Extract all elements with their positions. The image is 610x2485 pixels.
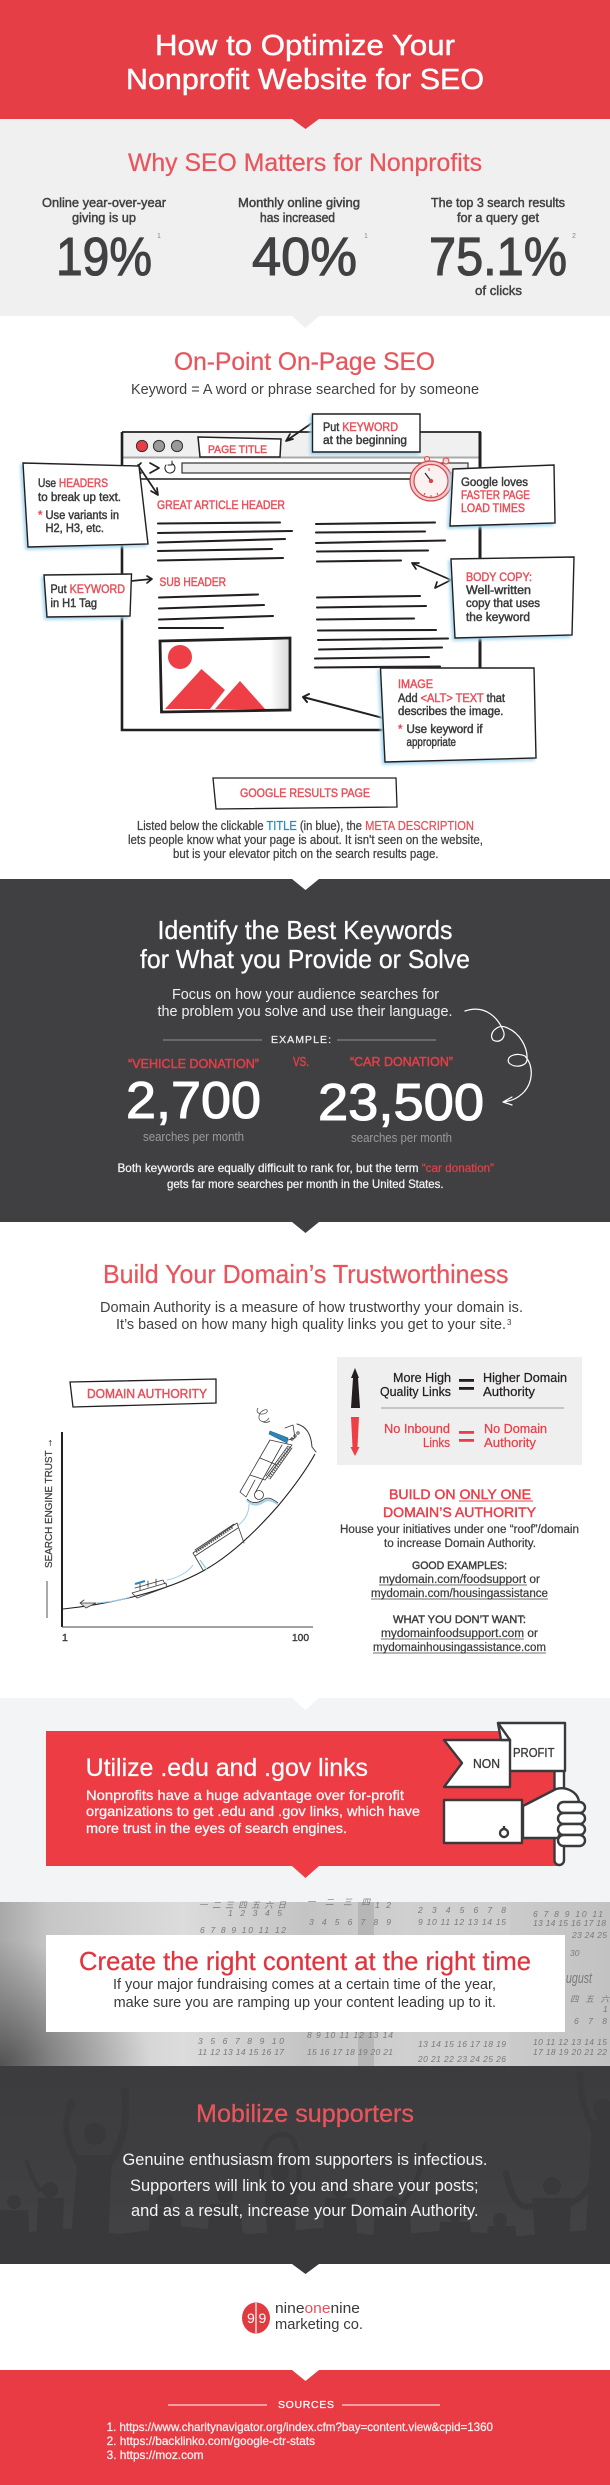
bad examples: mydomainfoodsupport.com or — [381, 1628, 538, 1640]
text: build on one domain — [340, 1487, 579, 1654]
water wake — [97, 1504, 249, 1603]
text: domain authority definition: 3 — [507, 1318, 512, 1327]
label: example: EXAMPLE: — [271, 1034, 331, 1046]
calendar numbers: 一 二 三 四 五 六 日 — [199, 1900, 286, 1910]
callout: image alt text: Add <ALT> TEXT that — [398, 693, 506, 705]
calendar numbers: 20 21 22 23 24 25 26 — [417, 2054, 506, 2064]
y axis label: SEARCH ENGINE TRUST → — [43, 1438, 55, 1568]
text: google results explanation — [128, 819, 483, 861]
text: fundraising timing: make sure you are ramping up your content leading up to it. — [114, 1994, 496, 2011]
callout: keyword in H1: in H1 Tag — [50, 598, 97, 610]
title — [126, 30, 484, 96]
text: more links: Higher Domain — [483, 1370, 567, 1385]
text: no links: No Inbound — [384, 1421, 450, 1436]
source list: 2. https://backlinko.com/google-ctr-stats — [107, 2434, 315, 2448]
stat: 40 percent: Monthly online giving — [238, 196, 360, 210]
good examples — [371, 1560, 548, 1600]
icon: aircraft carrier — [240, 1408, 316, 1504]
icon: stopwatch — [410, 456, 452, 501]
heading: identify keywords: for What you Provide or Solve — [140, 944, 470, 974]
keyword: vehicle donation — [126, 1056, 261, 1144]
logo: nine one nine marketing: 9 — [258, 2310, 266, 2326]
stat: 75.1 percent: for a query get — [457, 211, 540, 225]
calendar numbers — [198, 1897, 610, 2064]
good examples: mydomain.com/housingassistance — [371, 1588, 548, 1600]
text: build on one domain: BUILD ON ONLY ONE — [389, 1487, 531, 1502]
axes — [61, 1432, 63, 1627]
callout: image alt text: Use keyword if — [406, 724, 483, 736]
text: genuine enthusiasm: Supporters will link to you and share your posts; — [130, 2176, 479, 2195]
section: identify keywords — [0, 879, 610, 1233]
calendar numbers: 10 11 12 13 14 15 — [533, 2037, 607, 2047]
heading: identify keywords — [140, 915, 470, 974]
article header label: GREAT ARTICLE HEADER — [157, 498, 285, 512]
lower right text lines — [315, 596, 448, 668]
stat: 40 percent: 40% — [252, 227, 357, 287]
calendar numbers: 23 24 25 — [571, 1930, 607, 1940]
calendar numbers: 9 10 11 12 13 14 15 — [418, 1917, 506, 1927]
text: keyword comparison — [118, 1161, 494, 1191]
image placeholder — [160, 638, 290, 712]
text: no links: No Domain — [484, 1421, 547, 1436]
keyword definition: Keyword = A word or phrase searched for by someone — [131, 382, 479, 398]
calendar numbers: 四 五 六 — [570, 1994, 610, 2004]
label: versus: VS. — [293, 1054, 309, 1069]
callout: headers: to break up text. — [38, 492, 121, 504]
icon: hand holding nonprofit flag: PROFIT — [513, 1746, 555, 1760]
text: more links: More High — [393, 1370, 451, 1385]
text: build on one domain: House your initiatives under one “roof”/domain — [340, 1524, 579, 1536]
callout: image alt text: * — [398, 724, 403, 736]
stat: 75.1 percent: of clicks — [475, 284, 522, 298]
text: no links: Links — [423, 1435, 450, 1450]
calendar numbers: 15 16 17 18 19 20 21 — [307, 2047, 393, 2057]
stat: 40 percent — [238, 196, 368, 287]
x axis labels: 1 — [62, 1632, 68, 1644]
page title tab — [198, 437, 281, 457]
growth curve — [63, 1454, 315, 1609]
section: right content right time — [0, 1897, 610, 2066]
text: fundraising timing: If your major fundraising comes at a certain time of the year, — [113, 1976, 496, 1993]
window buttons — [136, 440, 183, 452]
panel: link quality comparison — [337, 1357, 582, 1465]
title: How to Optimize Your — [155, 30, 456, 62]
callout: headers: H2, H3, etc. — [46, 523, 104, 535]
text: focus on audience: the problem you solve and use their language. — [158, 1003, 452, 1020]
keyword: car donation — [318, 1054, 484, 1145]
text: domain authority definition — [100, 1299, 523, 1333]
callout: keyword in H1: Put KEYWORD — [50, 584, 125, 596]
logo: nine one nine marketing: marketing co. — [275, 2316, 363, 2333]
text: google results explanation: lets people know what your page is about. It isn't seen on the website, — [128, 833, 483, 847]
calendar numbers: 30 — [570, 1948, 580, 1958]
text: build on one domain: DOMAIN’S AUTHORITY — [383, 1505, 536, 1520]
stat: 75.1 percent — [429, 196, 576, 298]
callout: faster page load — [450, 465, 555, 526]
keyword: car donation: “CAR DONATION” — [350, 1054, 453, 1069]
text: no links: Authority — [484, 1435, 536, 1450]
logo: nine one nine marketing — [242, 2300, 363, 2334]
icon: cruise ship — [193, 1523, 244, 1570]
calendar numbers: 3 5 6 7 8 9 10 — [198, 2036, 284, 2046]
label: sources: SOURCES — [278, 2399, 334, 2411]
keyword: car donation: searches per month — [351, 1131, 452, 1145]
callout: faster page load: Google loves — [461, 477, 528, 489]
text: google results explanation: Listed below the clickable TITLE (in blue), the META DESCRIPTION — [137, 819, 474, 833]
text: keyword comparison: gets far more searches per month in the United States. — [167, 1177, 444, 1191]
heading: mobilize supporters: Mobilize supporters — [196, 2100, 414, 2128]
bad examples — [373, 1614, 546, 1654]
stat: 19 percent: 1 — [157, 233, 161, 240]
calendar numbers: 11 12 13 14 15 16 17 — [198, 2047, 284, 2057]
heading: on-page SEO: On-Point On-Page SEO — [174, 348, 435, 376]
panel: content timing — [46, 1935, 565, 2032]
stat: 19 percent: 19% — [56, 227, 152, 287]
calendar numbers: 6 7 8 — [574, 2016, 607, 2026]
callout: faster page load: LOAD TIMES — [461, 503, 525, 515]
text: domain authority definition: Domain Authority is a measure of how trustworthy your domain is. — [100, 1299, 523, 1316]
bad examples: WHAT YOU DON’T WANT: — [393, 1614, 526, 1626]
stat: 40 percent: has increased — [260, 211, 335, 225]
callout: body copy: BODY COPY: — [466, 572, 532, 584]
x axis labels: 100 — [292, 1632, 309, 1644]
calendar numbers: 8 9 10 11 12 13 14 — [307, 2030, 393, 2040]
stat: 40 percent: 1 — [364, 233, 368, 240]
right column text lines — [316, 522, 445, 562]
icon: yacht — [132, 1579, 167, 1598]
calendar numbers: 3 4 5 6 7 8 9 — [309, 1917, 391, 1927]
source list: 3. https://moz.com — [107, 2448, 204, 2462]
title: Nonprofit Website for SEO — [126, 64, 484, 96]
callout: page title keyword — [286, 414, 420, 452]
left column text lines — [158, 522, 292, 560]
logo: nine one nine marketing: 9 — [247, 2310, 255, 2326]
callout: headers — [23, 463, 158, 547]
label: google results page: GOOGLE RESULTS PAGE — [240, 786, 370, 800]
text: google results explanation: but is your elevator pitch on the search results page. — [173, 847, 438, 861]
callout: body copy: the keyword — [466, 612, 530, 624]
callout: headers: Use HEADERS — [38, 478, 108, 490]
text: edu links — [86, 1787, 420, 1836]
calendar numbers: 17 18 19 20 21 22 — [533, 2047, 607, 2057]
calendar numbers: 6 7 8 9 10 11 12 — [200, 1925, 286, 1935]
text: genuine enthusiasm — [122, 2150, 488, 2220]
heading: create content: Create the right content at the right time — [79, 1946, 531, 1976]
callout: page title keyword: Put KEYWORD — [323, 422, 398, 434]
text: focus on audience — [158, 986, 452, 1020]
calendar numbers: 13 14 15 16 17 18 — [533, 1918, 606, 1928]
text: fundraising timing — [113, 1976, 496, 2011]
label: domain authority — [70, 1379, 216, 1407]
bad examples: mydomainhousingassistance.com — [373, 1642, 546, 1654]
stat: 19 percent: Online year-over-year — [42, 196, 166, 210]
navigation icons and address bar — [136, 461, 468, 473]
heading: build trustworthiness: Build Your Domain’s Trustworthiness — [103, 1259, 508, 1289]
calendar numbers: 1 2 3 4 5 — [228, 1908, 282, 1918]
heading: identify keywords: Identify the Best Keywords — [158, 915, 452, 945]
x axis labels — [62, 1632, 309, 1644]
chart: domain authority curve — [43, 1408, 316, 1644]
callout: faster page load: FASTER PAGE — [461, 490, 530, 502]
section: mobilize supporters — [0, 2066, 610, 2274]
calendar numbers: 1 — [603, 2004, 608, 2014]
label: domain authority: DOMAIN AUTHORITY — [87, 1387, 208, 1401]
text: focus on audience: Focus on how your audience searches for — [172, 986, 439, 1003]
label: google results page — [213, 778, 397, 809]
text: domain authority definition: It’s based on how many high quality links you get to your site. — [116, 1316, 506, 1333]
source list — [107, 2420, 493, 2462]
arrow: curly arrow — [465, 1009, 531, 1105]
good examples: GOOD EXAMPLES: — [412, 1560, 507, 1572]
callout: page title keyword: at the beginning — [323, 435, 407, 447]
stat: 19 percent — [42, 196, 166, 287]
callout: body copy: Well-written — [466, 585, 531, 597]
good examples: mydomain.com/foodsupport or — [379, 1574, 540, 1586]
text: keyword comparison: Both keywords are equally difficult to rank for, but the term “car donation” — [118, 1161, 494, 1175]
callout: body copy — [412, 557, 574, 638]
text: genuine enthusiasm: Genuine enthusiasm from supporters is infectious. — [122, 2150, 488, 2169]
stat: 19 percent: giving is up — [72, 211, 136, 225]
text: more links: Authority — [483, 1384, 535, 1399]
text: edu links: more trust in the eyes of search engines. — [86, 1820, 347, 1836]
page title tab: PAGE TITLE — [208, 444, 267, 456]
icon: small boat — [80, 1600, 96, 1608]
text: edu links: Nonprofits have a huge advantage over for-profit — [86, 1787, 404, 1803]
keyword: vehicle donation: “VEHICLE DONATION” — [128, 1056, 259, 1071]
calendar numbers: 13 14 15 16 17 18 19 — [418, 2039, 506, 2049]
calendar numbers: 一 二 三 四 — [307, 1897, 371, 1907]
icon: hand holding nonprofit flag: NON — [473, 1757, 500, 1771]
sub header label: SUB HEADER — [160, 575, 226, 589]
stat: 75.1 percent: The top 3 search results — [431, 196, 565, 210]
source list: 1. https://www.charitynavigator.org/index.cfm?bay=content.view&cpid=1360 — [107, 2420, 493, 2434]
callout: image alt text — [303, 668, 536, 762]
text: more links — [380, 1370, 567, 1399]
callout: image alt text: appropriate — [406, 737, 456, 749]
keyword: car donation: 23,500 — [318, 1074, 484, 1132]
callout: image alt text: describes the image. — [398, 706, 504, 718]
icon: black up arrow — [351, 1368, 360, 1408]
icon: red down arrow — [350, 1417, 360, 1456]
heading: why SEO matters: Why SEO Matters for Nonprofits — [128, 149, 482, 177]
callout: body copy: copy that uses — [466, 598, 540, 610]
browser window illustration — [122, 432, 481, 730]
heading: utilize links: Utilize .edu and .gov links — [86, 1754, 368, 1782]
callout: keyword in H1 — [44, 574, 152, 617]
calendar numbers: 6 7 8 9 10 11 — [533, 1909, 603, 1919]
keyword: vehicle donation: 2,700 — [126, 1072, 261, 1130]
stat: 75.1 percent: 2 — [572, 233, 576, 240]
icon: hand holding nonprofit flag — [444, 1723, 585, 1865]
crowd silhouettes — [0, 2072, 610, 2248]
callout: image alt text: IMAGE — [398, 679, 433, 691]
text: no links — [384, 1421, 547, 1450]
section: header banner — [0, 0, 610, 316]
section: sources — [0, 2370, 610, 2485]
section: why SEO matters — [42, 149, 576, 328]
section: edu and gov links — [0, 1698, 610, 1902]
keyword: vehicle donation: searches per month — [143, 1130, 244, 1144]
stat: 75.1 percent: 75.1% — [429, 227, 567, 287]
logo: nine one nine marketing: nineonenine — [275, 2300, 360, 2317]
calendar numbers: ugust — [566, 1970, 593, 1987]
lower left text lines — [159, 594, 273, 628]
calendar numbers: 1 2 — [375, 1900, 391, 1910]
calendar numbers: 2 3 4 5 6 7 8 — [417, 1905, 506, 1915]
text: more links: Quality Links — [380, 1384, 451, 1399]
text: build on one domain: to increase Domain Authority. — [384, 1538, 536, 1550]
text: edu links: organizations to get .edu and .gov links, which have — [86, 1803, 420, 1819]
text: genuine enthusiasm: and as a result, increase your Domain Authority. — [131, 2201, 479, 2220]
callout: headers: * — [38, 510, 43, 522]
callout: headers: Use variants in — [46, 510, 119, 522]
